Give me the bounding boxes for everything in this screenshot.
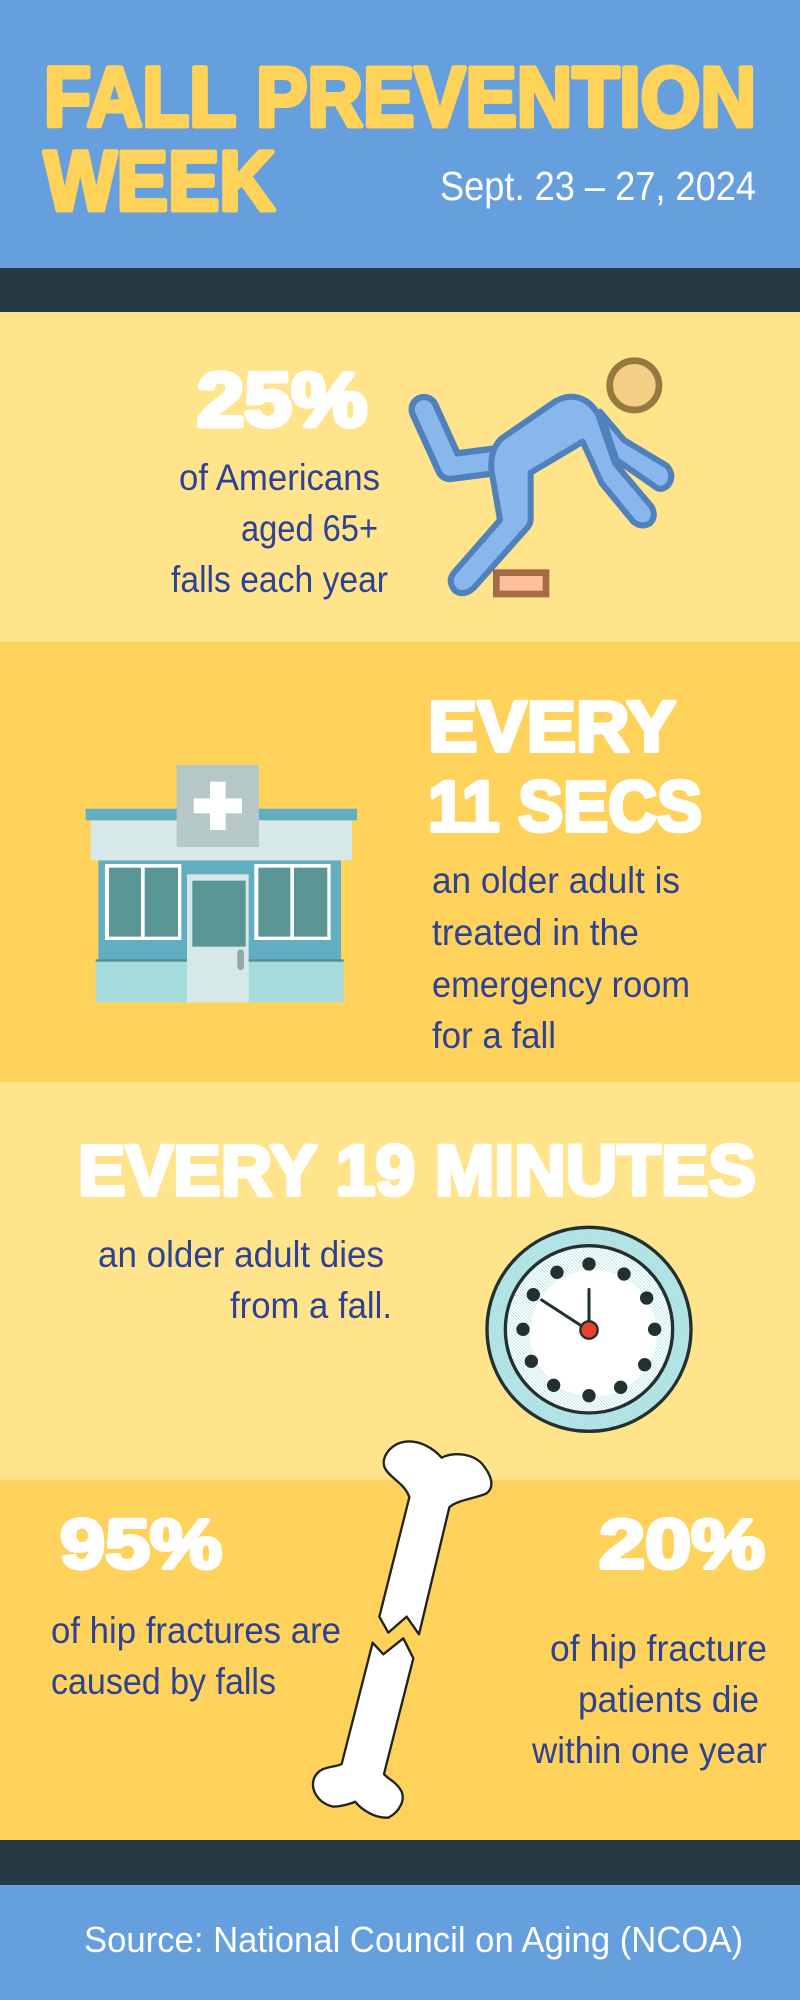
icon: hospital: [86, 765, 357, 1002]
text: patients die within one year: [531, 1628, 767, 1771]
heading: every 11 secs: [428, 688, 702, 847]
text: of Americans aged 65+ falls each year: of Americans: [179, 457, 380, 498]
text: emergency room: treated in the: [432, 912, 639, 953]
panel: source background: [0, 1885, 800, 2000]
text: emergency room: emergency room: [432, 964, 690, 1005]
panel: hip fractures background: [0, 1480, 800, 1840]
text: of Americans aged 65+ falls each year: aged 65+: [241, 508, 378, 549]
text: older adult dies from a fall: from a fall.: [230, 1285, 392, 1326]
title: WEEK: [44, 134, 275, 228]
text: older adult dies from a fall: [98, 1234, 392, 1326]
heading: every 11 secs: EVERY: [428, 688, 676, 767]
dark divider band bottom: [0, 1840, 800, 1885]
stat: 95%: 95%: [60, 1505, 222, 1583]
text: hip fractures caused by falls: of hip fractures are: [51, 1610, 341, 1651]
text: hip fractures caused by falls: caused by falls: [51, 1661, 276, 1702]
text: emergency room: [432, 860, 690, 1056]
icon: clock: [487, 1227, 691, 1431]
icon: broken bone: [313, 1441, 491, 1818]
panel: header background: [0, 0, 800, 268]
panel: every 11 secs background: [0, 642, 800, 1082]
title: [44, 50, 756, 228]
source: Source: National Council on Aging (NCOA): [84, 1919, 743, 1960]
panel: every 19 minutes background: [0, 1082, 800, 1480]
text: patients die within one year: of hip fracture: [550, 1628, 767, 1669]
text: older adult dies from a fall: an older adult dies: [98, 1234, 384, 1275]
text: emergency room: an older adult is: [432, 860, 680, 901]
title: FALL PREVENTION: [44, 50, 756, 144]
dark divider band top: [0, 268, 800, 312]
text: of Americans aged 65+ falls each year: [171, 457, 388, 600]
heading: every 19 minutes: EVERY 19 MINUTES: [78, 1132, 756, 1211]
text: of Americans aged 65+ falls each year: falls each year: [171, 559, 388, 600]
text: patients die within one year: within one year: [531, 1730, 767, 1771]
stat: 20%: 20%: [599, 1505, 765, 1583]
text: hip fractures caused by falls: [51, 1610, 341, 1702]
text: patients die within one year: patients die: [578, 1679, 759, 1720]
heading: every 11 secs: 11 SECS: [428, 768, 702, 847]
stat: 25%: 25%: [197, 358, 367, 443]
icon: falling person: [424, 361, 671, 594]
date: Sept. 23 – 27, 2024: [440, 163, 756, 209]
panel: 25% background: [0, 312, 800, 642]
text: emergency room: for a fall: [432, 1015, 556, 1056]
